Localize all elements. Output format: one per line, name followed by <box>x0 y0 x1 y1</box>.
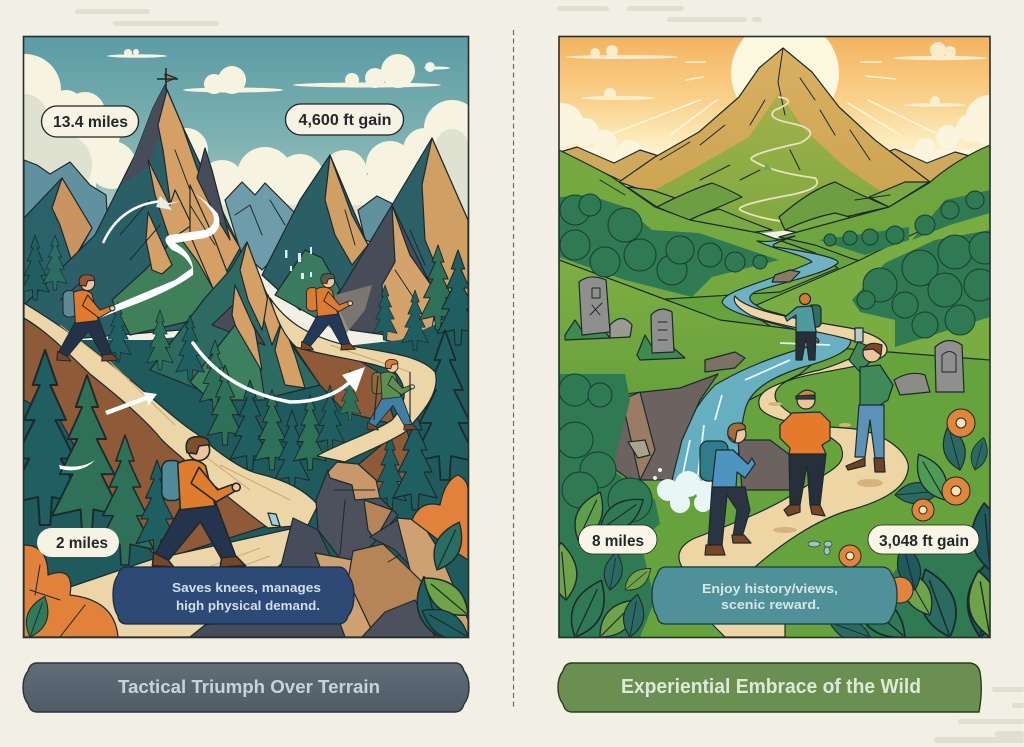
sky <box>23 36 468 236</box>
stat: 8 miles <box>578 525 657 554</box>
clouds <box>560 42 990 162</box>
panel: experiential valley scene <box>557 36 991 713</box>
foothills <box>627 182 929 235</box>
stat: 4,600 ft gain <box>286 104 404 135</box>
summit flag <box>157 68 178 90</box>
right foliage <box>830 427 990 637</box>
stat: 3,048 ft gain <box>868 525 979 554</box>
stat: 3,048 ft gain: 3,048 ft gain <box>879 533 969 550</box>
distant blue mountains <box>24 160 395 270</box>
hiker 2 <box>301 274 356 350</box>
hiker: orange jacket <box>780 390 830 516</box>
stat: 4,600 ft gain: 4,600 ft gain <box>298 112 392 129</box>
forest ground <box>24 310 468 637</box>
stat: 13.4 miles <box>42 106 138 137</box>
main summit <box>24 68 250 340</box>
hiking path <box>679 296 908 637</box>
right peaks <box>262 138 468 350</box>
side gold hills <box>562 146 968 182</box>
orange and green foliage <box>21 475 476 647</box>
pebbles <box>808 541 832 555</box>
hiker: blue jacket <box>700 423 755 555</box>
winding trails <box>24 298 436 637</box>
divider <box>512 30 514 710</box>
standing stones <box>565 277 964 395</box>
banner: tactical triumph: Tactical Triumph Over Terrain <box>118 677 380 697</box>
white route arrows <box>59 190 365 470</box>
brown slopes <box>24 318 420 560</box>
sun rays <box>614 62 935 135</box>
callout: saves knees: high physical demand. <box>176 598 320 613</box>
stat: 2 miles <box>37 528 119 557</box>
banner: experiential embrace <box>558 663 981 712</box>
callout: enjoy history: Enjoy history/views, <box>702 581 838 596</box>
rock formation <box>190 462 468 637</box>
golden sky <box>559 36 990 166</box>
panel: tactical mountain scene <box>0 36 480 712</box>
valley hills <box>559 145 990 410</box>
hiker 4 <box>152 437 246 567</box>
summit switchback trail <box>740 97 817 224</box>
waterfall foam <box>653 468 715 513</box>
stream and waterfall <box>672 236 851 495</box>
callout: saves knees <box>113 567 354 624</box>
hiker: teal jacket by stream <box>785 294 821 360</box>
pine forest <box>21 235 479 510</box>
stat: 2 miles: 2 miles <box>56 535 108 552</box>
hiker 1 <box>57 275 118 361</box>
hiker 3 <box>367 359 417 430</box>
callout: enjoy history <box>652 567 897 624</box>
lower meadow base <box>616 238 990 637</box>
stat: 13.4 miles: 13.4 miles <box>53 114 128 131</box>
forest bushes <box>559 190 1001 347</box>
left foliage <box>560 374 660 637</box>
sun <box>731 37 839 98</box>
hiker: green jacket with camera <box>846 328 893 472</box>
far left peak <box>24 178 92 310</box>
stat: 8 miles: 8 miles <box>592 533 644 550</box>
callout: enjoy history: scenic reward. <box>721 597 820 612</box>
central mountain <box>619 48 930 240</box>
front peak <box>150 242 320 400</box>
banner: tactical triumph <box>23 663 469 712</box>
flowers <box>839 409 975 603</box>
clouds <box>0 49 480 240</box>
foreground pines <box>24 348 174 566</box>
banner: experiential embrace: Experiential Embrace of the Wild <box>621 676 921 698</box>
callout: saves knees: Saves knees, manages <box>172 580 321 595</box>
rocky cliff <box>602 270 800 490</box>
